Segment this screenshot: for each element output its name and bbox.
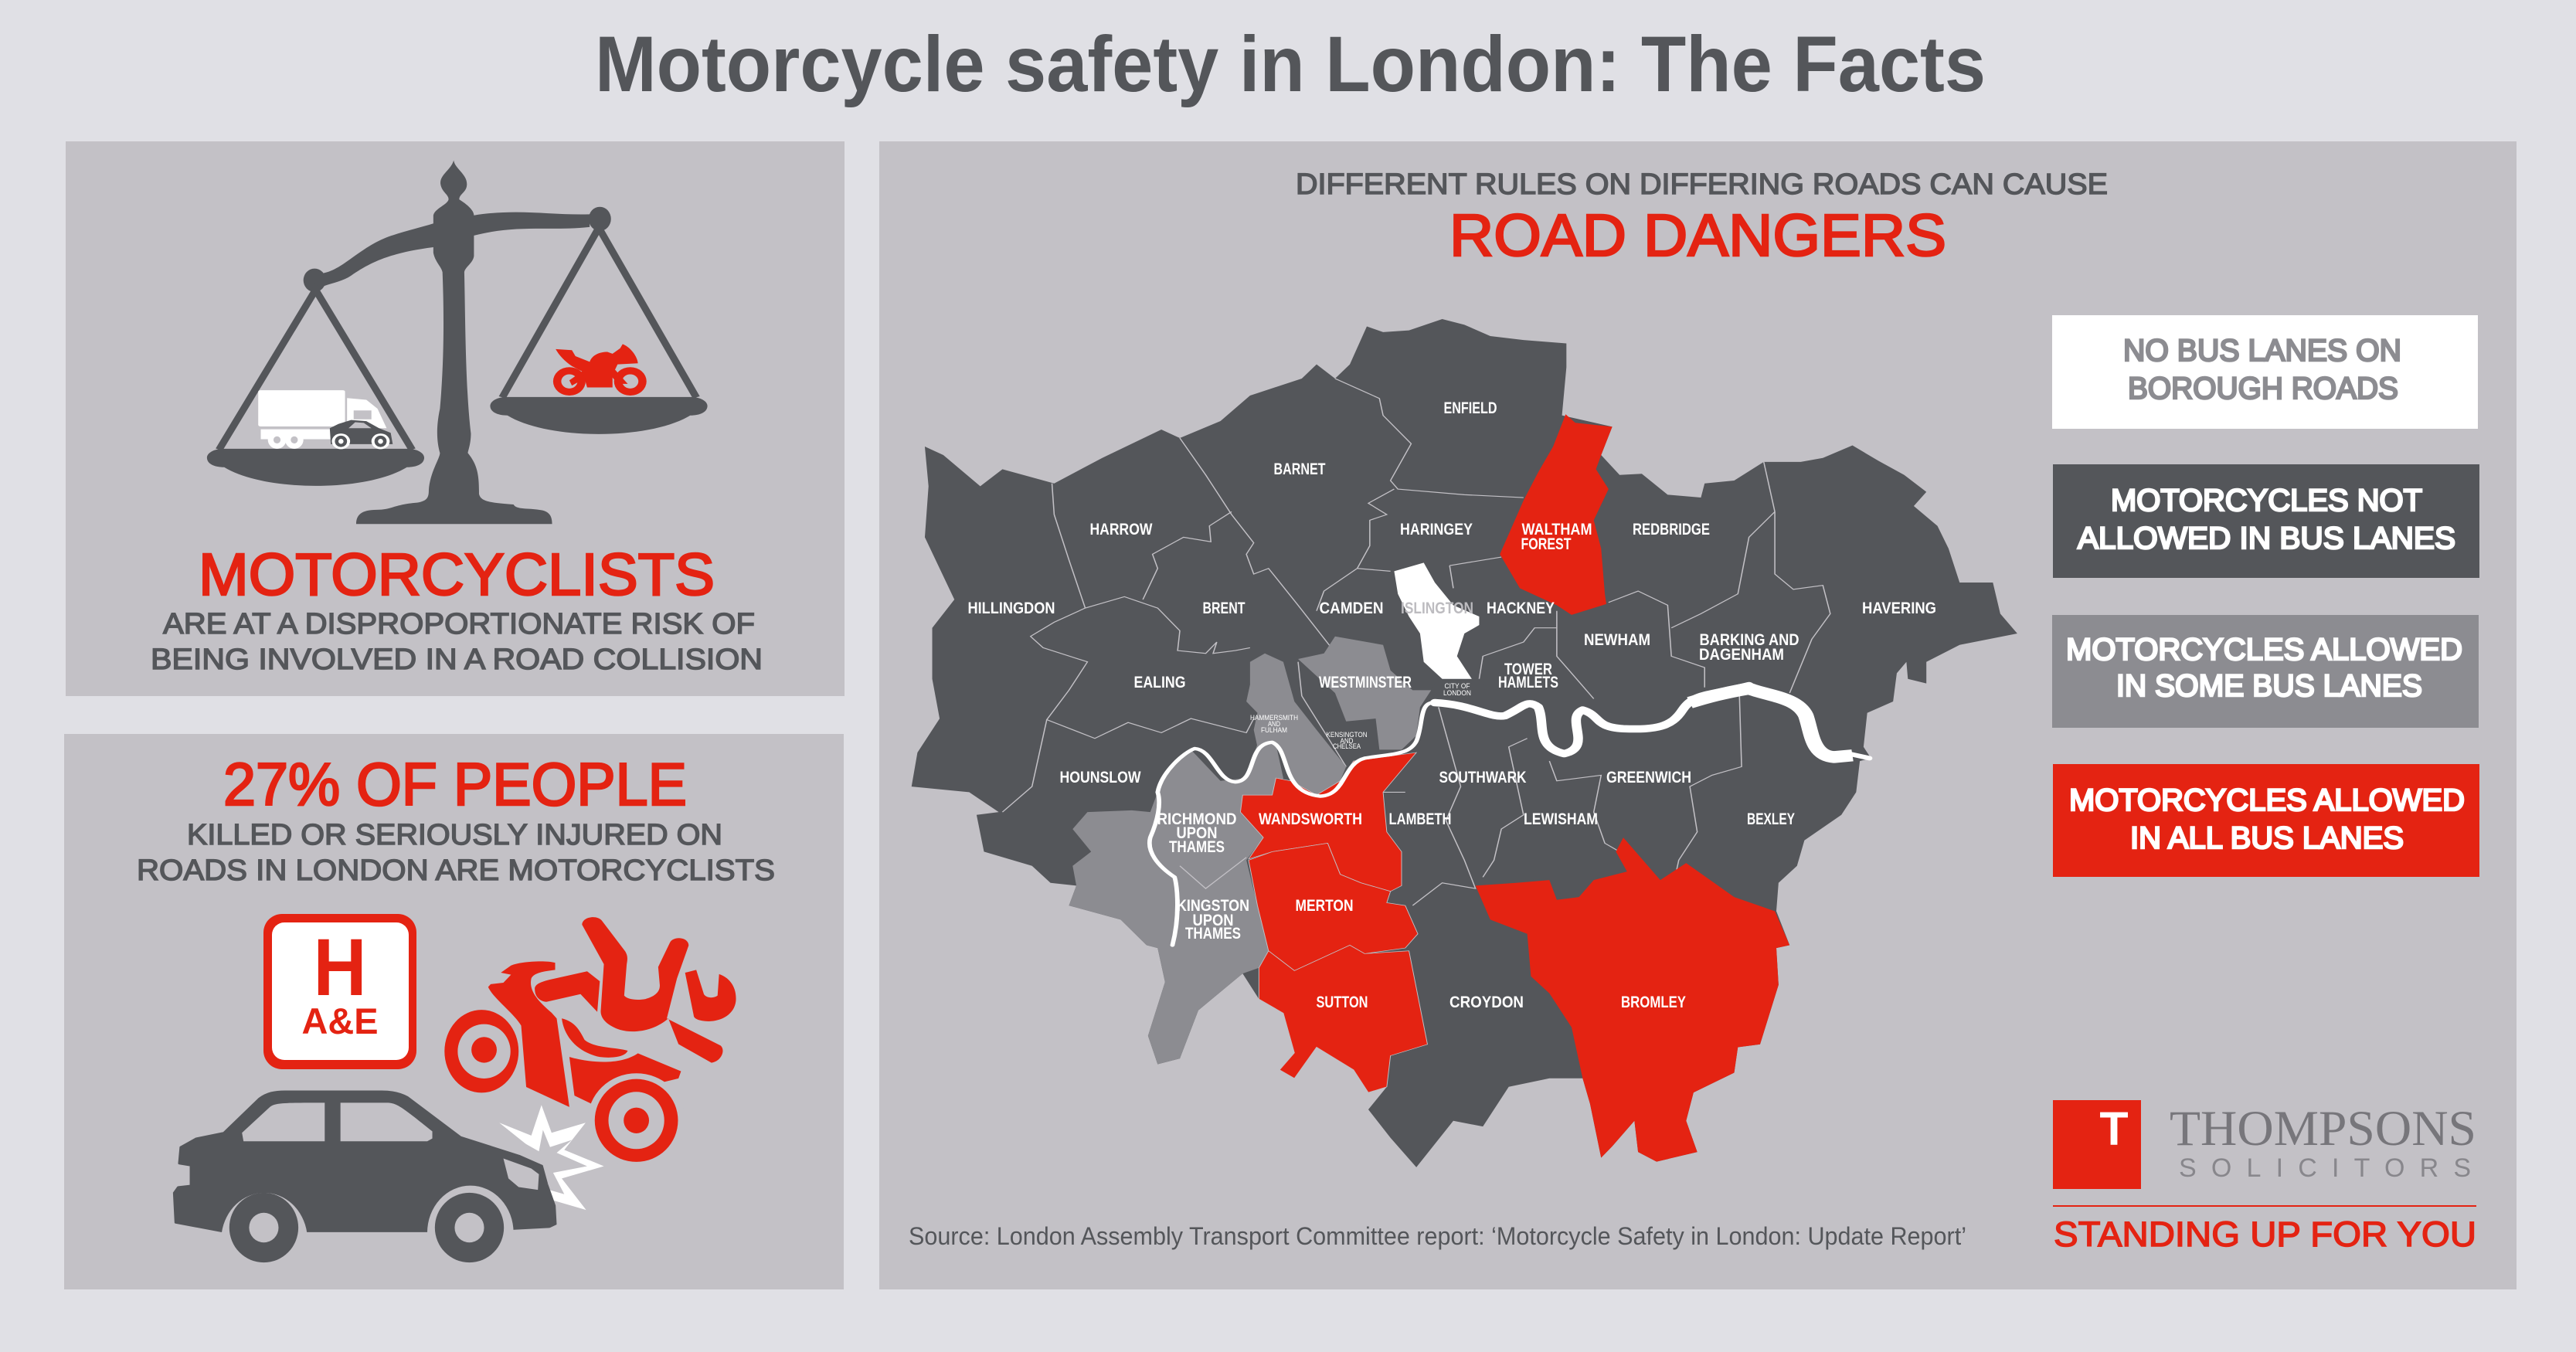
logo: Thompsons Solicitors <box>2053 1100 2476 1254</box>
right pan <box>490 397 708 434</box>
map: borough labels: BEXLEY <box>1747 810 1795 828</box>
map: dark boroughs <box>912 319 2017 1167</box>
heading: motorcyclists: MOTORCYCLISTS <box>199 542 715 608</box>
map: borough labels: HAMMERSMITH <box>1250 714 1298 722</box>
left pan <box>207 449 424 486</box>
map: borough labels: SOUTHWARK <box>1439 769 1527 786</box>
tagline: STANDING UP FOR YOU <box>2054 1214 2476 1254</box>
map: borough labels: CHELSEA <box>1333 742 1361 750</box>
title: Motorcycle safety in London: The Facts <box>595 20 1986 108</box>
map: borough labels: AND <box>1268 720 1280 728</box>
map: borough labels: HARINGEY <box>1400 521 1473 538</box>
text: killed or seriously injured <box>137 819 775 887</box>
map: borough labels: CROYDON <box>1449 994 1524 1011</box>
map: borough labels: LEWISHAM <box>1524 810 1598 828</box>
map: borough labels: ISLINGTON <box>1401 600 1473 617</box>
map: borough labels: KINGSTON <box>1177 897 1249 915</box>
map: borough labels: FOREST <box>1521 535 1572 553</box>
map: borough labels: BARNET <box>1273 460 1326 478</box>
map: borough labels: GREENWICH <box>1606 769 1691 786</box>
map: borough labels: REDBRIDGE <box>1633 521 1710 538</box>
map: borough labels: MERTON <box>1295 897 1354 915</box>
legend: motorcycles not allowed: ALLOWED IN BUS LANES <box>2078 521 2455 555</box>
map: borough labels: WALTHAM <box>1522 521 1592 538</box>
map: borough labels: NEWHAM <box>1584 631 1650 649</box>
text: killed or seriously injured: KILLED OR SERIOUSLY INJURED ON <box>187 819 722 851</box>
map: white borough, no bus lanes <box>1394 562 1479 679</box>
icon: balance scales <box>207 161 708 524</box>
map: borough labels: BRENT <box>1202 600 1246 617</box>
icon: thrown motorcyclist <box>444 917 736 1167</box>
source note: Source: London Assembly Transport Committee report: ‘Motorcycle Safety in London: Update Report’ <box>909 1222 1966 1250</box>
map: borough labels: EALING <box>1134 674 1185 691</box>
map: London boroughs <box>912 319 2017 1167</box>
map: borough labels: LAMBETH <box>1389 810 1451 828</box>
map: borough labels: BROMLEY <box>1621 994 1686 1011</box>
heading: road dangers: ROAD DANGERS <box>1449 202 1946 269</box>
map: borough labels: CITY OF <box>1445 682 1470 690</box>
map: borough labels: HAMLETS <box>1498 674 1558 691</box>
map: borough labels: HOUNSLOW <box>1060 769 1141 786</box>
legend: no bus lanes on borough roads <box>2052 315 2478 429</box>
icon: small car <box>330 420 393 449</box>
map: borough labels: BARKING AND <box>1700 631 1799 649</box>
logo: Thompsons Solicitors: SOLICITORS <box>2179 1153 2471 1183</box>
legend: motorcycles allowed in all bus lanes: IN ALL BUS LANES <box>2130 821 2404 855</box>
icon: hospital A&E sign: H <box>314 922 366 1013</box>
icon: collision scene <box>175 917 736 1262</box>
map: river thames <box>1150 686 1870 945</box>
legend: motorcycles not allowed <box>2053 464 2479 578</box>
text: disproportionate risk: ARE AT A DISPROPORTIONATE RISK OF <box>163 608 755 640</box>
heading: 27% of people: 27% OF PEOPLE <box>223 750 687 818</box>
map: borough labels: ENFIELD <box>1443 399 1497 417</box>
map: borough labels: DAGENHAM <box>1699 646 1784 664</box>
legend: motorcycles allowed in some bus lanes: MOTORCYCLES ALLOWED <box>2066 633 2462 667</box>
icon: hospital A&E sign: A&E <box>301 1000 379 1041</box>
legend: motorcycles allowed in some bus lanes <box>2052 615 2479 728</box>
map: borough labels: HACKNEY <box>1487 600 1555 617</box>
map: borough labels: AND <box>1340 737 1354 745</box>
map: borough labels: TOWER <box>1504 661 1552 678</box>
map: borough labels <box>967 399 1936 1011</box>
panel: motorcyclists disproportionate risk <box>66 141 845 696</box>
map: red boroughs, all bus lanes <box>1240 414 1789 1162</box>
map: borough labels: CAMDEN <box>1320 600 1383 617</box>
panel: road dangers map <box>879 141 2517 1289</box>
icon: red motorbike <box>553 344 647 396</box>
icon: lorry <box>258 390 386 449</box>
map: borough labels: KENSINGTON <box>1326 731 1368 739</box>
map: borough labels: HAVERING <box>1862 600 1936 617</box>
text: different rules: DIFFERENT RULES ON DIFFERING ROADS CAN CAUSE <box>1296 168 2108 201</box>
map: borough labels: HARROW <box>1089 521 1153 538</box>
map: borough labels: UPON <box>1193 912 1233 929</box>
text: disproportionate risk <box>151 608 763 676</box>
map: borough labels: THAMES <box>1169 838 1225 856</box>
map: borough labels: FULHAM <box>1261 726 1287 734</box>
map: borough labels: WESTMINSTER <box>1319 674 1412 691</box>
logo: Thompsons Solicitors: T <box>2099 1102 2129 1155</box>
legend: no bus lanes on borough roads: NO BUS LANES ON <box>2123 334 2401 368</box>
legend: motorcycles not allowed: MOTORCYCLES NOT <box>2111 484 2422 518</box>
map: borough labels: UPON <box>1176 824 1218 842</box>
panel: 27 percent of people <box>64 734 844 1289</box>
icon: impact star <box>499 1105 604 1210</box>
map: borough labels: HILLINGDON <box>967 600 1055 617</box>
legend: no bus lanes on borough roads: BOROUGH ROADS <box>2128 372 2398 406</box>
legend: motorcycles allowed in all bus lanes: MOTORCYCLES ALLOWED <box>2069 783 2465 817</box>
map: borough labels: WANDSWORTH <box>1259 810 1362 828</box>
map: borough labels: SUTTON <box>1317 994 1368 1011</box>
icon: grey car <box>175 1092 556 1262</box>
text: killed or seriously injured: ROADS IN LONDON ARE MOTORCYCLISTS <box>137 854 775 887</box>
icon: hospital A&E sign <box>263 914 416 1069</box>
map: borough labels: THAMES <box>1185 925 1241 943</box>
map: borough labels: LONDON <box>1443 689 1471 697</box>
legend: motorcycles allowed in all bus lanes <box>2053 764 2479 877</box>
map: grey boroughs, some bus lanes <box>1069 637 1431 1064</box>
map: city of london <box>1431 679 1487 703</box>
logo: Thompsons Solicitors: THOMPSONS <box>2170 1101 2476 1157</box>
text: disproportionate risk: BEING INVOLVED IN A ROAD COLLISION <box>151 644 763 676</box>
map: borough labels: RICHMOND <box>1157 810 1236 828</box>
legend: motorcycles allowed in some bus lanes: IN SOME BUS LANES <box>2116 669 2422 703</box>
